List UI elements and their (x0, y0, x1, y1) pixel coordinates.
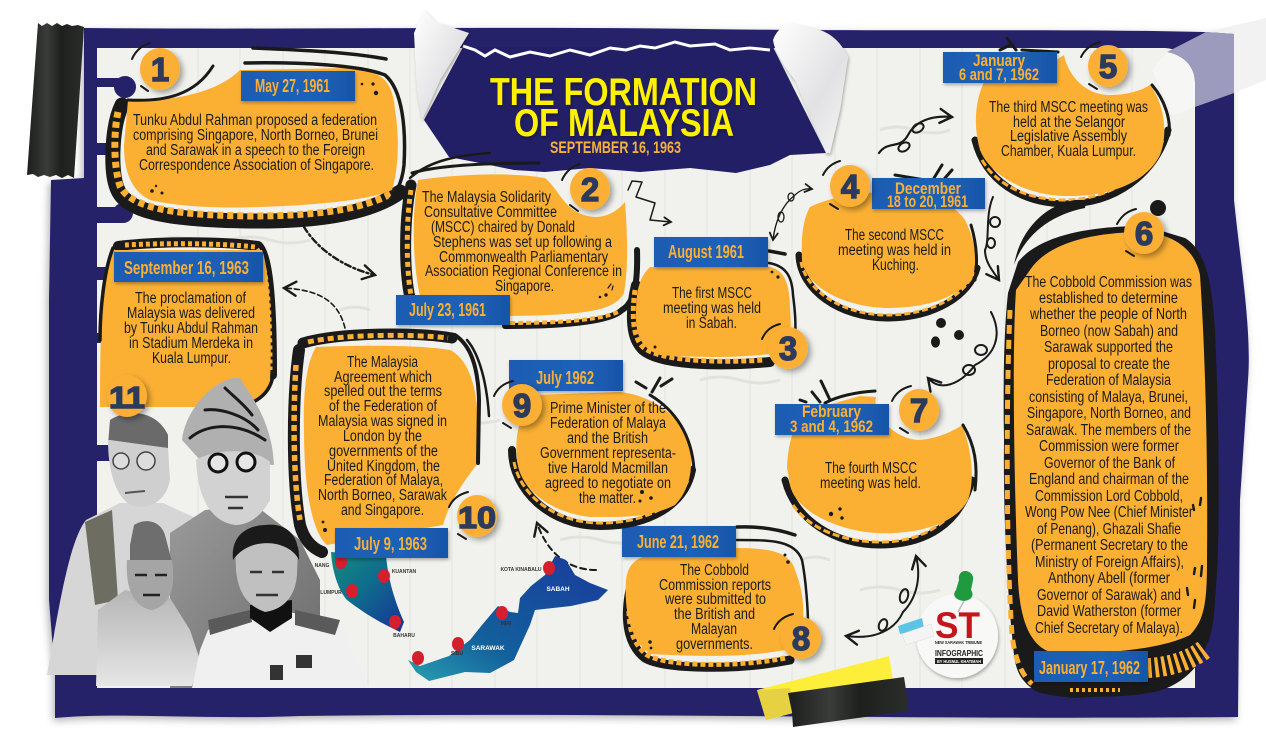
portrait: man in uniform (192, 525, 369, 688)
date label: July 9, 1963 (354, 534, 427, 554)
peninsular Malaysia (331, 552, 404, 632)
description: David Watherston (former (1037, 603, 1182, 620)
translucent tape top right (1152, 18, 1266, 115)
description (540, 400, 676, 507)
description: The third MSCC meeting was (989, 99, 1148, 116)
description: Consultative Committee (424, 204, 557, 221)
description: by Tunku Abdul Rahman (124, 320, 258, 337)
description: The first MSCC (672, 285, 752, 302)
bubble 3 (632, 237, 795, 364)
description: were submitted to (664, 591, 766, 608)
description (422, 189, 622, 295)
description: established to determine (1039, 290, 1178, 307)
portrait: man in turban (170, 378, 320, 688)
description: Kuala Lumpur. (152, 350, 231, 367)
map labels (315, 563, 570, 657)
description: The Malaysia Solidarity (422, 189, 551, 206)
description: Malaysia was delivered (127, 305, 255, 322)
date label (335, 528, 448, 558)
date label (241, 71, 355, 101)
date label (622, 526, 736, 557)
number 3 (762, 324, 808, 369)
date label: May 27, 1961 (255, 76, 330, 96)
bubble 10 (294, 334, 489, 558)
description: the British and (674, 606, 755, 623)
date label (1034, 651, 1148, 682)
curly arrow 7 to 8 (846, 556, 918, 637)
bubble 1 (113, 48, 405, 221)
date label: July 23, 1961 (409, 300, 486, 320)
description: Anthony Abell (former (1048, 570, 1171, 587)
title text: THE FORMATION (490, 71, 757, 114)
number 11 (107, 375, 147, 417)
bubble 9 (509, 360, 694, 526)
torn white top edge (463, 42, 770, 57)
description: in Stadium Merdeka in (129, 335, 253, 352)
number 1: 1 (151, 51, 169, 88)
description: Kuching. (872, 257, 919, 274)
title text (490, 71, 757, 145)
date label (114, 252, 263, 282)
description (838, 227, 951, 274)
date label: January (973, 52, 1026, 70)
description: Governor of Sarawak) and (1037, 587, 1181, 604)
date label (775, 403, 889, 436)
date label (396, 295, 510, 325)
description: Stephens was set up following a (433, 234, 612, 251)
number 10 (449, 492, 497, 539)
map labels: SIBU (451, 651, 463, 657)
description: Chief Secretary of Malaya). (1035, 620, 1183, 637)
left page curl (414, 10, 469, 120)
description (989, 99, 1148, 160)
portrait: man in songkok (96, 521, 200, 686)
description: Legislative Assembly (1010, 128, 1127, 145)
description: Commission were former (1039, 438, 1180, 455)
date label (509, 360, 623, 391)
description: London by the (343, 428, 422, 445)
date label: December (895, 180, 961, 198)
description: Borneo (now Sabah) and (1040, 323, 1178, 340)
description: Tunku Abdul Rahman proposed a federation (133, 112, 377, 129)
date label: 18 to 20, 1961 (887, 193, 968, 211)
description: agreed to negotiate on (545, 475, 671, 492)
number 4: 4 (841, 168, 860, 205)
description: Prime Minister of the (550, 400, 666, 417)
description: The Malaysia (347, 354, 418, 371)
date label: January 17, 1962 (1039, 658, 1140, 678)
description: of Penang), Ghazali Shafie (1037, 521, 1181, 538)
number 2 (562, 164, 610, 211)
description: Sarawak supported the (1044, 339, 1173, 356)
description: The Cobbold Commission was (1025, 274, 1192, 291)
arrow 1 to 2 dashed (304, 227, 375, 275)
description: North Borneo, Sarawak (318, 487, 447, 504)
number 2: 2 (581, 171, 599, 208)
description: proposal to create the (1048, 356, 1170, 373)
description: and Singapore. (341, 502, 424, 519)
description: The second MSCC (845, 227, 944, 244)
description: Commission Lord Cobbold, (1035, 488, 1183, 505)
small blue and white tape (898, 618, 934, 645)
description: Agreement which (334, 369, 432, 386)
push pin (954, 571, 973, 612)
number 7 (892, 386, 939, 433)
map labels: NANG (315, 563, 329, 569)
date label: February (802, 403, 862, 421)
description: (Permanent Secretary to the (1031, 537, 1188, 554)
description: Singapore, North Borneo, and (1027, 405, 1191, 422)
description: Governor of the Bank of (1044, 455, 1175, 472)
black tape top left (27, 23, 84, 178)
banner torn shape (424, 47, 826, 173)
number circles (107, 42, 1164, 659)
description: governments of the (329, 443, 438, 460)
description: Malayan (691, 621, 737, 638)
description: Federation of Malaysia (1046, 372, 1171, 389)
title text: OF MALAYSIA (514, 102, 734, 145)
arrow 10 to 11 dashed (284, 288, 345, 328)
bubble 2 (396, 153, 637, 326)
paper sheet (97, 48, 1195, 688)
description (124, 290, 258, 367)
date label: July 1962 (536, 368, 594, 388)
byline: BY HUSNUL KHATIMAH (937, 659, 981, 664)
description (820, 460, 921, 492)
date label: 3 and 4, 1962 (790, 418, 873, 436)
title date: SEPTEMBER 16, 1963 (550, 138, 681, 157)
number 6 (1117, 209, 1164, 256)
bubble 11 (100, 242, 272, 407)
number 9 (494, 381, 542, 428)
description: England and chairman of the (1029, 471, 1189, 488)
number 1 (132, 43, 180, 91)
map labels: KOTA KINABALU (500, 567, 542, 573)
date label: August 1961 (668, 242, 744, 262)
number 4 (823, 161, 870, 209)
description: Sarawak. The members of the (1026, 422, 1191, 439)
tribune line: NEW SARAWAK TRIBUNE (935, 640, 982, 645)
bubble 6 (1004, 200, 1219, 698)
bubble 4 (799, 165, 985, 318)
description: and Sarawak in a speech to the Foreign (146, 142, 365, 159)
description: Commission reports (659, 577, 771, 594)
description: Correspondence Association of Singapore. (139, 157, 374, 174)
description: Wong Pow Nee (Chief Minister (1025, 504, 1194, 521)
description: Chamber, Kuala Lumpur. (1001, 143, 1136, 160)
curly arrow 4 to 5 (879, 117, 952, 153)
yellow tape bottom (757, 656, 893, 720)
portrait: old man with glasses (47, 413, 215, 675)
description: Ministry of Foreign Affairs), (1035, 554, 1184, 571)
zigzag arrow 2 to 3 (628, 181, 671, 222)
date label: June 21, 1962 (637, 532, 719, 552)
map labels: BAHARU (393, 633, 415, 639)
tail to bubble 6 (1014, 200, 1086, 265)
curly arrow 6 to 7 (928, 312, 997, 385)
map labels: SARAWAK (471, 645, 505, 652)
bubble 5 (943, 38, 1169, 265)
description: Association Regional Conference in (425, 263, 622, 280)
description: Federation of Malaya (550, 415, 666, 432)
description (663, 285, 761, 332)
number 10: 10 (458, 500, 496, 535)
description: The proclamation of (135, 290, 247, 307)
description: tive Harold Macmillan (548, 460, 668, 477)
description: governments. (676, 636, 753, 653)
description: of the Federation of (329, 398, 438, 415)
arrow 8 to 9 dashed (537, 523, 596, 570)
description: comprising Singapore, North Borneo, Brunei (133, 127, 378, 144)
description: (MSCC) chaired by Donald (431, 219, 575, 236)
description: Malaysia was signed in (318, 413, 447, 430)
number 3: 3 (779, 330, 797, 367)
description: spelled out the terms (324, 383, 442, 400)
description: meeting was held in (838, 242, 951, 259)
number 7: 7 (910, 392, 928, 429)
map labels: SABAH (546, 586, 570, 593)
number 11: 11 (109, 380, 145, 415)
description: Federation of Malaya, (324, 472, 443, 489)
description: whether the people of North (1029, 306, 1187, 323)
description: meeting was held (663, 300, 761, 317)
curly arrow 3 to 4 (773, 189, 812, 240)
number 6: 6 (1135, 215, 1153, 252)
description: Singapore. (495, 278, 554, 295)
infographic word: INFOGRAPHIC (935, 649, 983, 658)
description: Government representa- (540, 445, 676, 462)
ST logo: ST (935, 605, 980, 646)
title banner (414, 10, 848, 173)
description (1025, 274, 1194, 637)
map pins (335, 555, 555, 665)
description: Commonwealth Parliamentary (439, 249, 608, 266)
number 9: 9 (513, 387, 531, 424)
description (318, 354, 447, 519)
date label: September 16, 1963 (124, 258, 249, 278)
number 5: 5 (1099, 48, 1117, 85)
date label (654, 237, 768, 267)
description: The fourth MSCC (825, 460, 917, 477)
description: and the British (567, 430, 648, 447)
bubble 8 (622, 526, 808, 667)
decorative dots (931, 318, 964, 348)
description: held at the Selangor (1013, 114, 1125, 131)
ST infographic badge (898, 571, 998, 678)
Sarawak and Sabah (408, 556, 608, 681)
curly arrow 5 to 6 (985, 197, 1000, 280)
portraits of four leaders (47, 378, 369, 688)
description: consisting of Malaya, Brunei, (1029, 389, 1188, 406)
description: meeting was held. (820, 475, 921, 492)
arrows (284, 117, 1000, 637)
description: The Cobbold (680, 562, 749, 579)
number 5 (1081, 42, 1128, 89)
map labels: MIRI (501, 621, 512, 627)
description (659, 562, 771, 653)
bubble 7 (775, 381, 976, 545)
date label: 6 and 7, 1962 (959, 66, 1039, 84)
map labels: LUMPUR (320, 590, 342, 596)
description (133, 112, 378, 174)
right page curl (773, 23, 848, 153)
map of Malaysia (315, 552, 608, 681)
date label (943, 52, 1057, 84)
map labels: KUANTAN (392, 569, 417, 575)
description: in Sabah. (686, 315, 737, 332)
number 8: 8 (792, 620, 810, 657)
black tape bottom (788, 677, 908, 727)
number 8 (774, 614, 821, 659)
date label (872, 178, 985, 211)
description: the matter. (579, 490, 636, 507)
description: United Kingdom, the (327, 458, 440, 475)
